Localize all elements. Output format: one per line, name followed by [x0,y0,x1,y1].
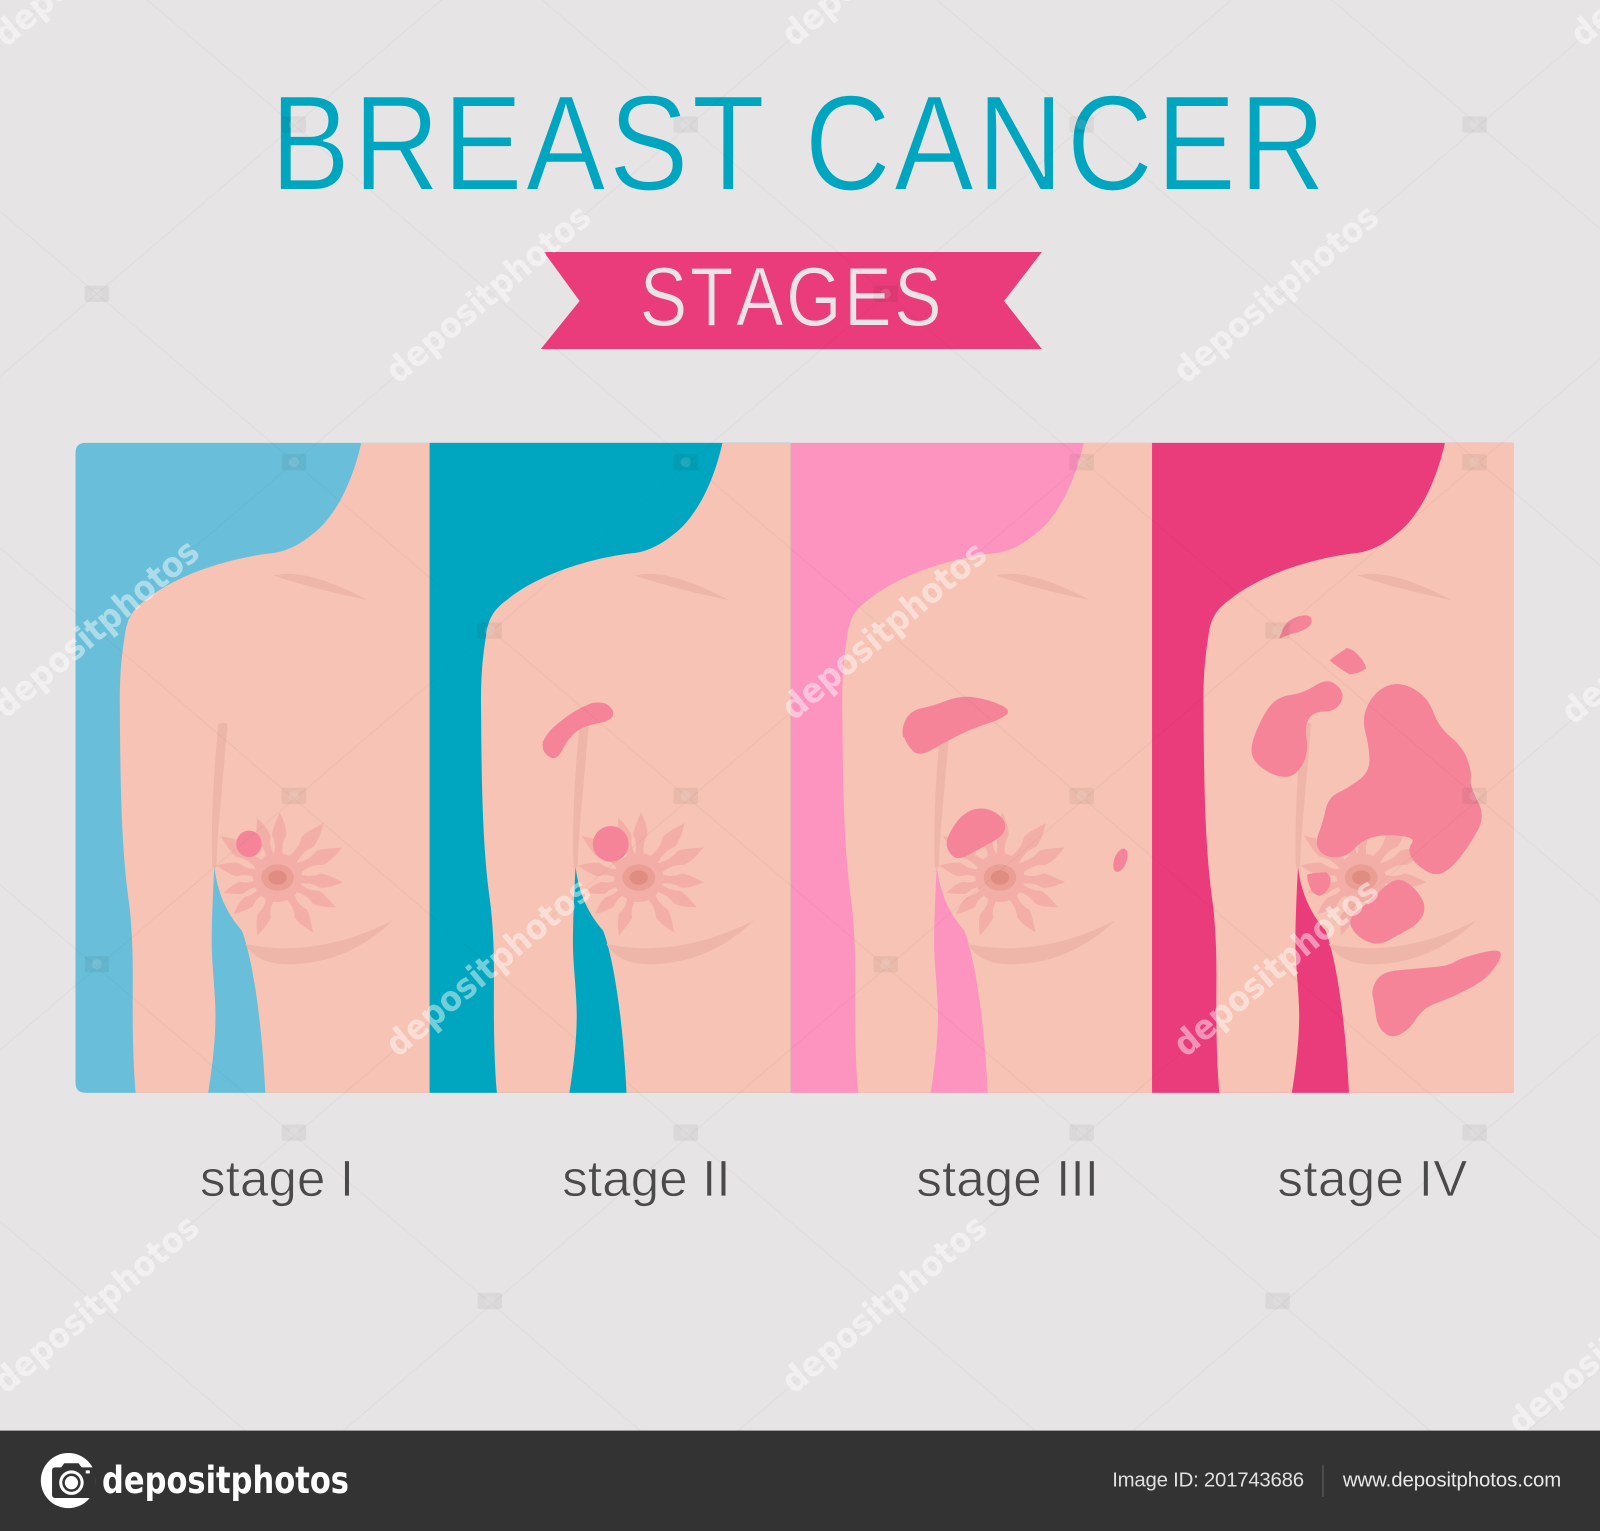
watermark overlay: depositphotos [774,534,995,728]
logo wordmark: depositphotos [102,1458,349,1502]
tumors: stage III [902,697,1130,874]
watermark overlay: depositphotos [378,197,599,392]
tumors: stage IV [1252,615,1501,1036]
panel: stage I [76,443,430,1093]
label: stage II: stage II [562,1150,731,1207]
footer bar [0,1431,1600,1531]
website: www.depositphotos.com [1342,1470,1561,1492]
watermark overlay: depositphotos [1166,870,1387,1065]
label: stage III: stage III [916,1150,1099,1207]
ribbon banner: stages: STAGES [640,251,942,344]
icon: camera logo [41,1453,96,1508]
ribbon banner: stages [541,251,1042,349]
image id: Image ID: 201743686 [1112,1470,1304,1492]
tumors: stage II [543,702,629,862]
panel: stage IV [1152,443,1513,1093]
watermark overlay: depositphotos [1166,197,1387,392]
title: BREAST CANCER [270,68,1326,220]
divider [1322,1465,1323,1497]
panel: stage II [430,443,791,1093]
watermark overlay: depositphotos [378,870,599,1065]
label: stage I: stage I [200,1150,354,1207]
watermark overlay: depositphotos [774,1207,995,1402]
label: stage IV: stage IV [1278,1150,1467,1207]
tumor: stage I [236,831,262,857]
panel: stage III [791,443,1152,1093]
